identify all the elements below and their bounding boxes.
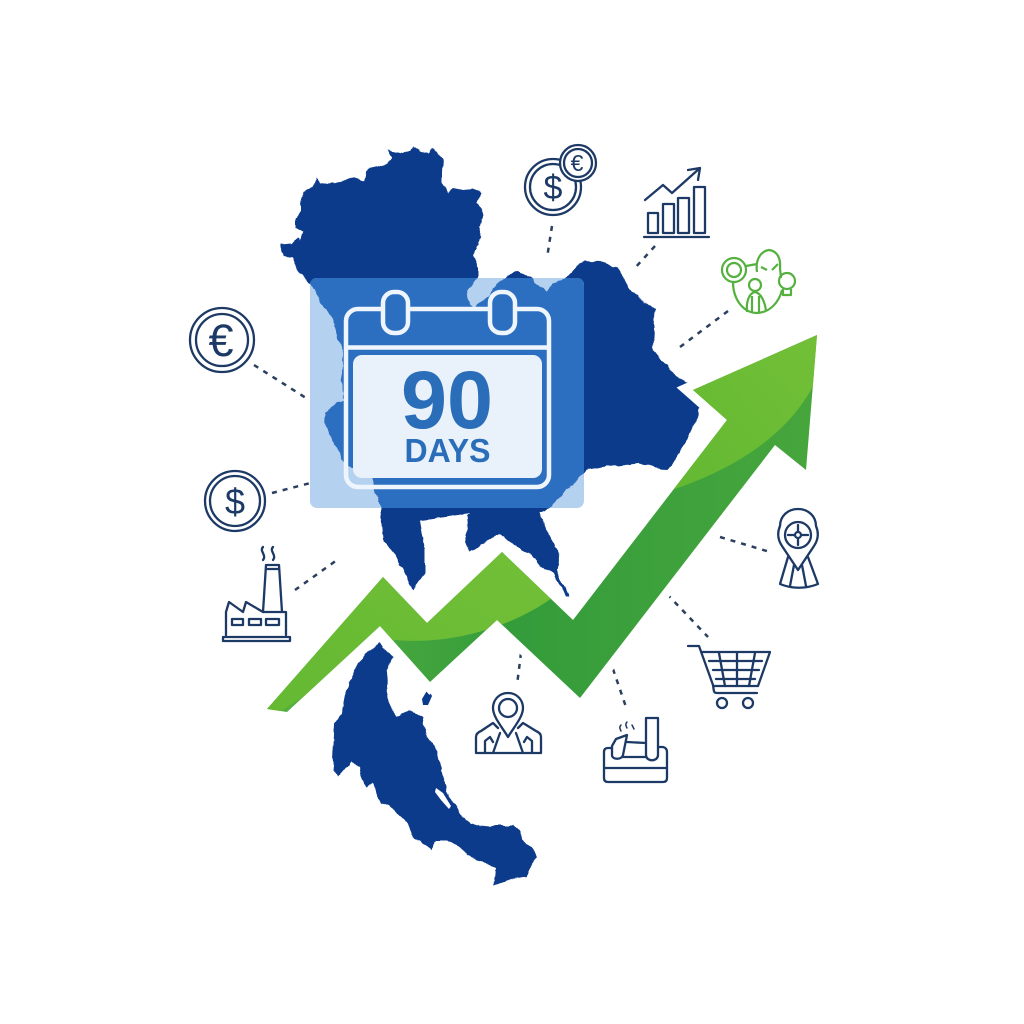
calendar ring left <box>383 292 408 333</box>
map: inland lake <box>435 788 451 809</box>
icon: shopping cart <box>688 646 770 708</box>
arrow body <box>267 335 817 712</box>
map: small island <box>422 689 432 705</box>
arrow highlights <box>267 335 817 711</box>
icon: location badge <box>778 509 818 588</box>
infographic canvas <box>188 144 820 886</box>
calendar ring right <box>490 292 515 333</box>
map: southern peninsula <box>332 643 537 885</box>
calendar icon <box>346 292 549 487</box>
translucent panel <box>310 278 584 508</box>
label DAYS: DAYS <box>404 432 490 469</box>
icon: euro coin <box>190 308 254 372</box>
panel over map <box>310 278 584 508</box>
icon: dollar and euro coins: € <box>571 150 584 176</box>
calendar page <box>353 355 542 478</box>
icon: euro coin: € <box>208 315 234 366</box>
growth arrow <box>267 335 817 712</box>
icon: factory <box>223 547 290 641</box>
icon: dollar and euro coins <box>525 145 596 215</box>
icon: person with location pin <box>476 693 541 753</box>
map: northern and central region <box>280 146 700 597</box>
calendar header divider <box>347 345 548 350</box>
icon: bar chart with trend arrow <box>644 168 709 237</box>
arrow white outline <box>267 335 817 712</box>
dashed connector lines <box>254 226 770 710</box>
icon: dollar coin <box>205 471 265 531</box>
calendar frame <box>346 309 549 487</box>
number 90: 90 <box>401 355 493 446</box>
icon: machine on box <box>604 718 667 782</box>
panel over background <box>310 278 584 508</box>
icon: dollar coin: $ <box>225 481 245 522</box>
icon: dollar and euro coins: $ <box>544 169 563 207</box>
icon: green cluster <box>722 250 795 313</box>
